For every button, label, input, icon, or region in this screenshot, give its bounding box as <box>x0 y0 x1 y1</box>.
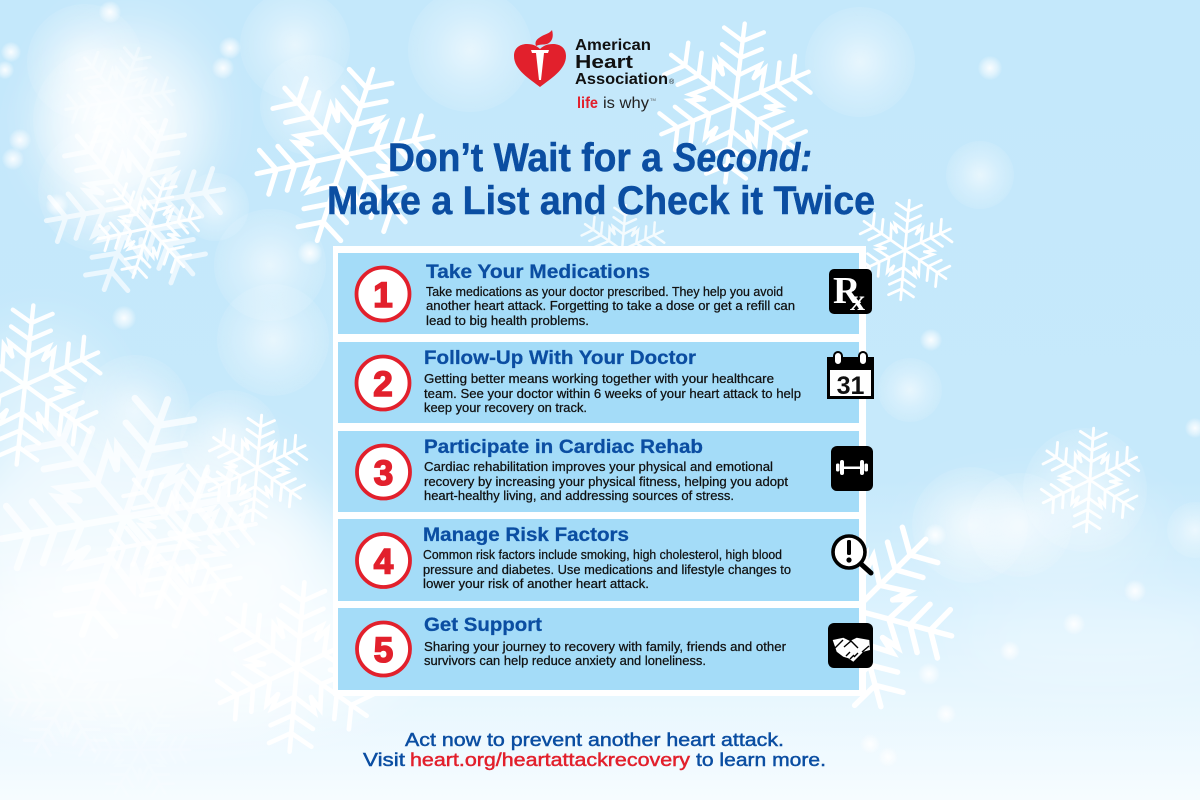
panel: checklist <box>333 246 866 696</box>
row 5: get support <box>338 608 859 690</box>
icon: prescription: x <box>850 284 865 317</box>
row 2: follow-up with your doctor: team. See your doctor within 6 weeks of your heart attack to help <box>424 387 801 401</box>
row 2: follow-up with your doctor: Getting better means working together with your healthcare <box>424 372 774 386</box>
icon: calendar <box>827 352 874 400</box>
row 1: take your medications: lead to big health problems. <box>426 314 589 328</box>
row 1: take your medications: another heart attack. Forgetting to take a dose or get a refill can <box>426 299 795 313</box>
footer call to action: Visit <box>363 750 405 770</box>
footer call to action <box>363 730 826 770</box>
row 5: get support: 5 <box>374 631 393 670</box>
icon: prescription: R <box>833 270 861 312</box>
row 3: participate in cardiac rehab: recovery by increasing your physical fitness, helping you adopt <box>424 475 789 489</box>
row 1: take your medications <box>338 253 859 334</box>
icon: magnifier with exclamation <box>833 536 871 573</box>
icon: heart and torch <box>514 30 566 87</box>
row 4: manage risk factors: Common risk factors include smoking, high cholesterol, high blood <box>423 548 782 562</box>
row 5: get support: survivors can help reduce anxiety and loneliness. <box>424 654 706 668</box>
icon: calendar: 31 <box>837 372 864 400</box>
row 2: follow-up with your doctor: Follow-Up With Your Doctor <box>424 348 697 369</box>
row 3: participate in cardiac rehab: 3 <box>374 454 393 493</box>
row 1: take your medications: Take Your Medications <box>426 262 650 283</box>
icon: handshake <box>828 623 873 668</box>
row 4: manage risk factors: pressure and diabetes. Use medications and lifestyle changes to <box>423 563 791 577</box>
row 3: participate in cardiac rehab: Participate in Cardiac Rehab <box>424 437 703 458</box>
title: Make a List and Check it Twice <box>327 179 875 223</box>
logo tagline <box>577 95 656 112</box>
footer call to action: to learn more. <box>696 750 826 770</box>
footer call to action: heart.org/heartattackrecovery <box>410 750 690 770</box>
cloud haze over faded snowflakes <box>0 60 305 740</box>
icon: prescription <box>829 269 872 317</box>
logo wordmark: ® <box>669 78 675 86</box>
row 4: manage risk factors: 4 <box>374 542 394 582</box>
footer call to action: Act now to prevent another heart attack. <box>405 730 784 750</box>
logo wordmark: Association <box>575 71 668 88</box>
row 2: follow-up with your doctor: keep your recovery on track. <box>424 401 587 415</box>
row 2: follow-up with your doctor <box>338 342 859 423</box>
row 5: get support: Sharing your journey to recovery with family, friends and other <box>424 640 786 654</box>
row 5: get support: Get Support <box>424 615 543 636</box>
row 4: manage risk factors: Manage Risk Factors <box>423 525 629 546</box>
logo wordmark: Heart <box>575 51 633 72</box>
row 3: participate in cardiac rehab: heart-healthy living, and addressing sources of stress. <box>424 489 734 503</box>
row 2: follow-up with your doctor: 2 <box>373 365 393 404</box>
logo wordmark <box>575 37 675 88</box>
title: Second: <box>673 136 812 180</box>
icon: dumbbell <box>831 446 873 491</box>
row 1: take your medications: 1 <box>373 276 393 315</box>
title: Don’t Wait for a <box>388 136 663 180</box>
logo: American Heart Association <box>514 30 675 112</box>
logo wordmark: American <box>575 37 651 54</box>
row 3: participate in cardiac rehab <box>338 431 859 512</box>
row 4: manage risk factors <box>338 519 859 601</box>
row 1: take your medications: Take medications as your doctor prescribed. They help you avoid <box>426 285 783 299</box>
title <box>327 136 875 223</box>
row 4: manage risk factors: lower your risk of another heart attack. <box>423 577 649 591</box>
logo tagline: TM <box>650 97 656 102</box>
logo tagline: life <box>577 95 598 112</box>
logo tagline: is why <box>603 95 649 112</box>
row 3: participate in cardiac rehab: Cardiac rehabilitation improves your physical and emotional <box>424 460 773 474</box>
